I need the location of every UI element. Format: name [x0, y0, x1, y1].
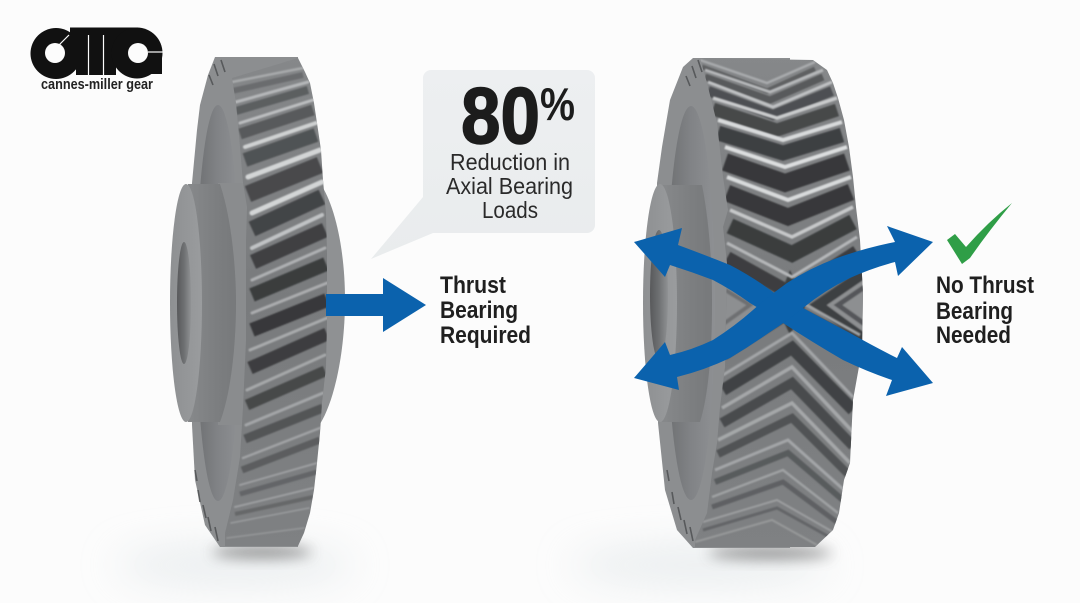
bubble shape	[371, 70, 595, 259]
arrow: thrust toward upper left and lower right	[634, 228, 933, 396]
grooves	[232, 75, 327, 514]
front hub face	[170, 184, 202, 422]
label: thrust bearing required: Required	[440, 322, 531, 349]
icon: green check mark	[947, 203, 1012, 264]
right herringbone gear	[643, 50, 870, 550]
front hub cylinder	[662, 185, 712, 422]
callout bubble	[371, 70, 595, 259]
callout caption: Reduction in	[450, 149, 570, 175]
front hub face	[643, 184, 677, 422]
floor shadows	[115, 546, 832, 583]
logo wordmark: cannes-miller gear	[41, 77, 153, 93]
callout caption	[446, 149, 573, 223]
arrow: single axial thrust	[326, 278, 426, 332]
arrow: thrust toward lower left and upper right	[634, 226, 933, 390]
label: thrust bearing required: Thrust	[440, 272, 506, 299]
root teeth edge marks	[195, 60, 225, 541]
label: no thrust bearing needed: No Thrust	[936, 272, 1034, 299]
centre side chevrons	[722, 270, 866, 342]
web recess	[196, 105, 240, 501]
percent sign: %	[540, 78, 575, 130]
front hub cylinder	[188, 184, 236, 422]
bore	[177, 242, 191, 364]
callout caption: Axial Bearing	[446, 173, 573, 199]
80 figure: 80	[461, 71, 540, 160]
label: thrust bearing required	[440, 272, 531, 349]
highlights	[695, 60, 860, 545]
gear back hub	[320, 183, 345, 424]
left helical gear	[170, 50, 345, 550]
label: no thrust bearing needed	[936, 272, 1034, 349]
logo mark	[30, 28, 164, 79]
label: no thrust bearing needed: Needed	[936, 322, 1011, 349]
gear web	[657, 58, 790, 548]
rim wedge beside hub	[218, 183, 250, 425]
root teeth edge marks	[667, 60, 702, 541]
bore	[650, 230, 668, 360]
web recess	[667, 106, 715, 500]
teeth band	[690, 50, 870, 550]
logo: cannes-miller gear	[30, 28, 164, 93]
callout caption: Loads	[482, 197, 538, 223]
grooves	[702, 67, 860, 539]
web rim between recess and teeth	[225, 82, 262, 533]
label: thrust bearing required: Bearing	[440, 297, 518, 324]
label: no thrust bearing needed: Bearing	[936, 298, 1013, 325]
gear web	[192, 57, 298, 547]
highlights	[227, 68, 327, 538]
teeth band	[225, 58, 327, 546]
